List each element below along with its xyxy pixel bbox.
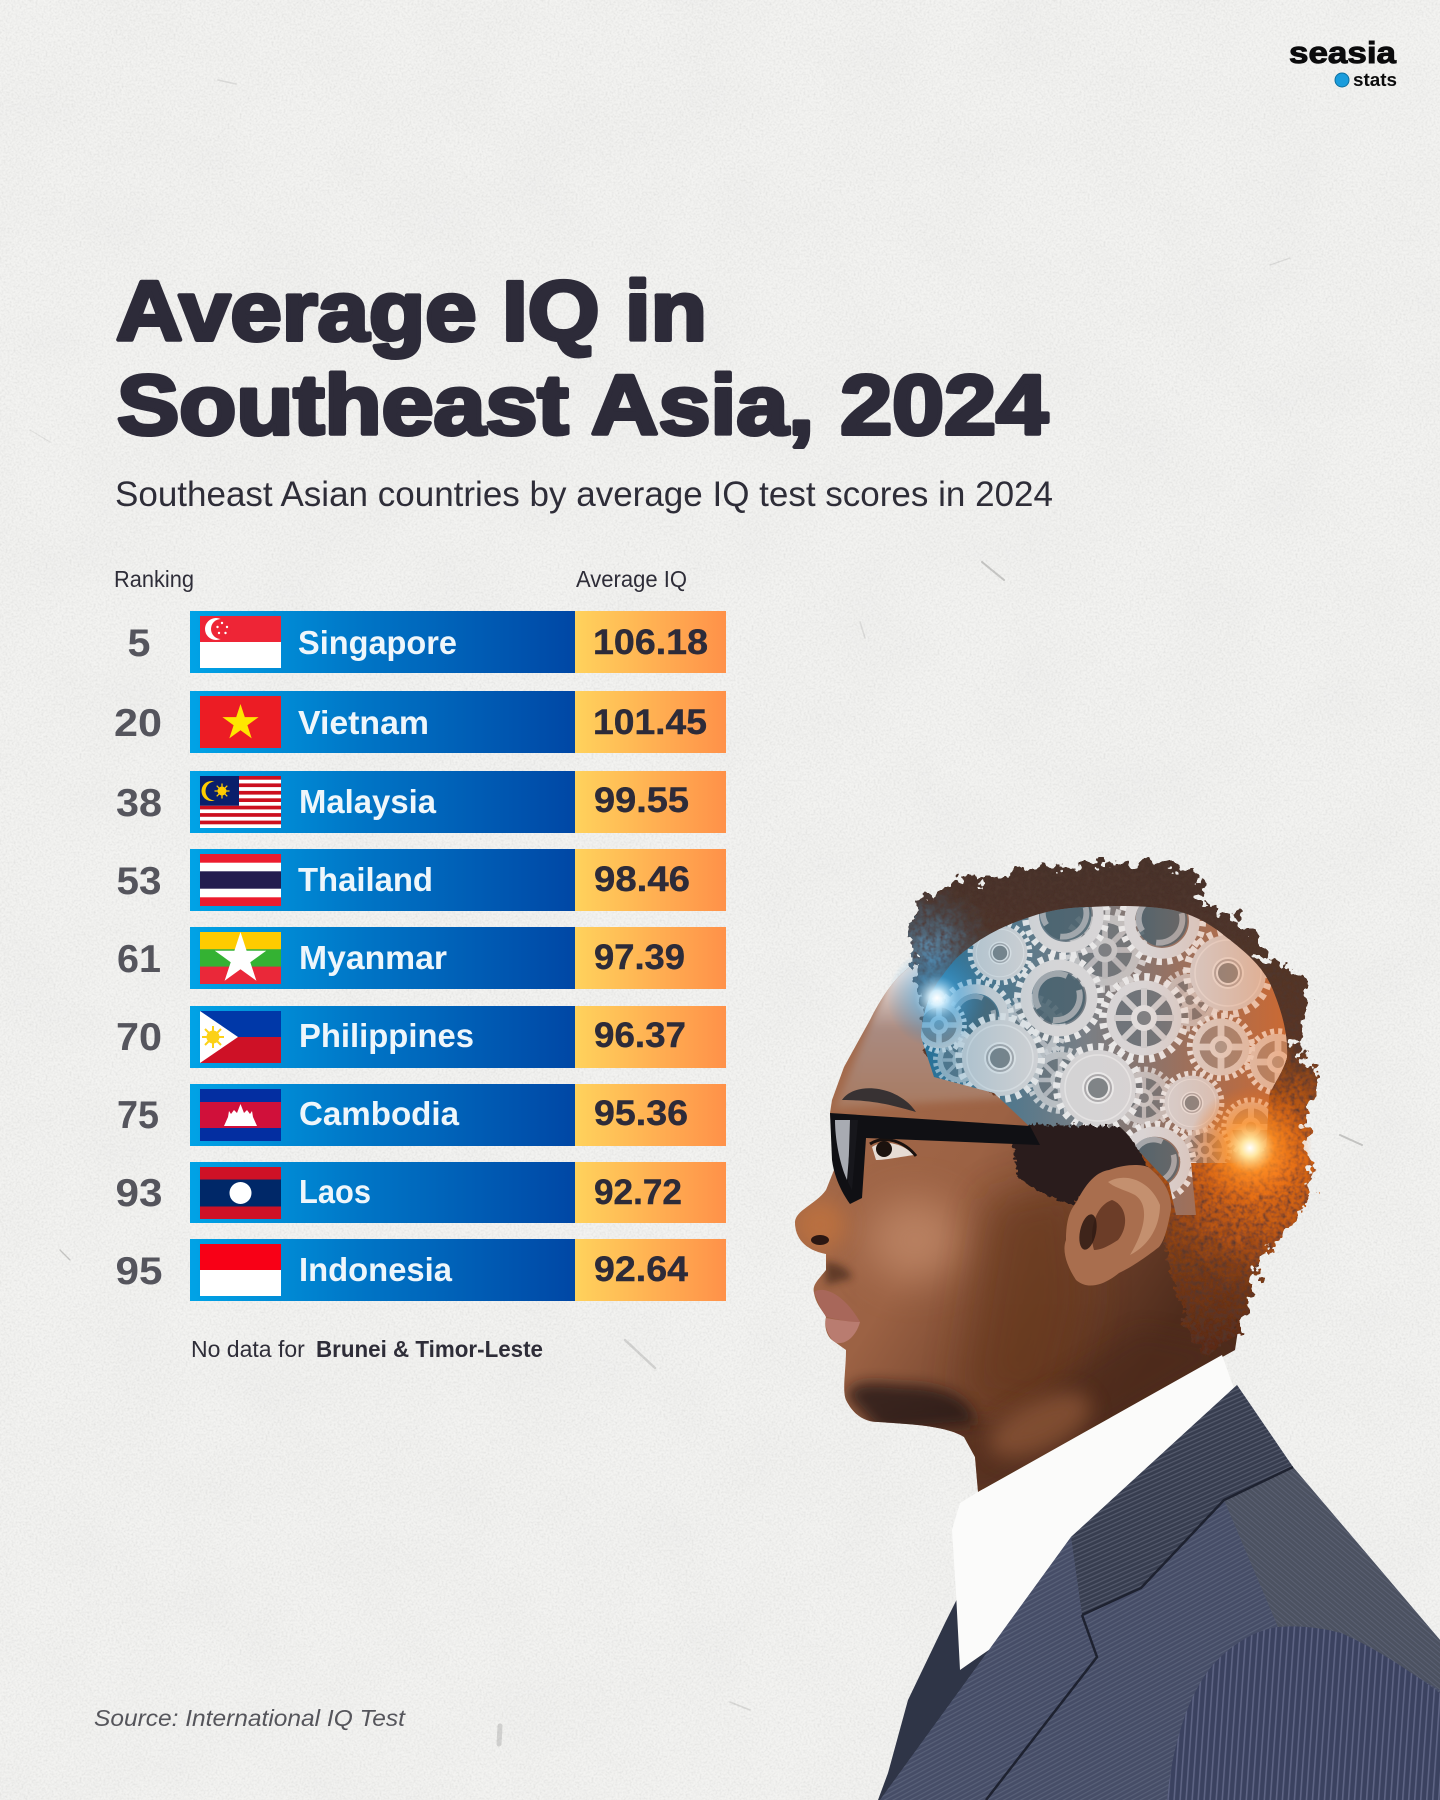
gears in head	[921, 906, 1288, 1215]
value box	[575, 771, 726, 833]
title: Average IQ in	[116, 264, 707, 358]
title	[116, 264, 1048, 452]
value: 101.45	[593, 703, 707, 742]
value box	[575, 1239, 726, 1301]
illustration: man in profile with gears	[794, 862, 1440, 1800]
value box	[575, 691, 726, 753]
value box	[575, 1084, 726, 1146]
row: Myanmar	[117, 927, 726, 989]
row: Thailand	[116, 849, 726, 911]
rank: 53	[116, 860, 162, 903]
bar	[190, 691, 575, 753]
flag: Cambodia	[200, 1089, 281, 1141]
skin: face and neck	[794, 950, 1250, 1500]
column header: Average IQ: Average IQ	[576, 566, 687, 592]
shoulder panel	[1224, 1467, 1440, 1690]
row: Vietnam	[114, 691, 726, 753]
value: 98.46	[594, 860, 690, 899]
flag: Myanmar	[200, 932, 281, 984]
rank: 93	[116, 1172, 162, 1215]
country name: Thailand	[298, 861, 433, 898]
lapel edge	[986, 1467, 1293, 1800]
rank: 95	[116, 1250, 162, 1293]
flag: Singapore	[200, 616, 281, 668]
logo subtext: stats	[1353, 70, 1397, 90]
value box	[575, 1006, 726, 1068]
rank: 70	[116, 1016, 162, 1059]
bar	[190, 1006, 575, 1068]
flag: Thailand	[200, 854, 281, 906]
bar	[190, 1162, 575, 1223]
value: 92.64	[594, 1250, 689, 1289]
rank: 5	[128, 622, 150, 665]
country name: Singapore	[298, 624, 457, 661]
row: Singapore	[128, 611, 726, 673]
subtitle: Southeast Asian countries by average IQ test scores in 2024	[115, 475, 1053, 514]
flare: blue light	[887, 948, 987, 1048]
source: Source: International IQ Test	[94, 1705, 407, 1731]
flag: Vietnam	[200, 696, 281, 748]
eyebrow	[842, 1088, 916, 1112]
value: 92.72	[594, 1173, 682, 1212]
jacket body	[880, 1385, 1440, 1800]
bar	[190, 1239, 575, 1301]
value box	[575, 611, 726, 673]
flag: Indonesia	[200, 1244, 281, 1296]
value box	[575, 927, 726, 989]
flare: orange light	[1188, 1086, 1312, 1210]
value: 99.55	[594, 781, 689, 820]
bar	[190, 1084, 575, 1146]
value: 97.39	[594, 938, 685, 977]
lapel	[880, 1537, 1097, 1800]
sleeve	[1167, 1626, 1440, 1800]
bar	[190, 771, 575, 833]
bar	[190, 611, 575, 673]
country name: Cambodia	[299, 1095, 460, 1132]
flag: Malaysia	[200, 776, 281, 828]
value: 106.18	[593, 623, 708, 662]
country name: Philippines	[299, 1017, 474, 1054]
bar	[190, 927, 575, 989]
eye	[870, 1140, 916, 1160]
icon: logo globe	[1335, 73, 1349, 87]
bar	[190, 849, 575, 911]
row: Indonesia	[116, 1239, 726, 1301]
column header: Ranking: Ranking	[114, 566, 194, 592]
rank: 20	[114, 702, 162, 745]
table of rankings	[114, 611, 726, 1301]
row: Laos	[116, 1162, 726, 1223]
title: Southeast Asia, 2024	[117, 358, 1048, 452]
value box	[575, 1162, 726, 1223]
row: Cambodia	[117, 1084, 726, 1146]
collar	[1071, 1385, 1293, 1615]
rank: 75	[117, 1094, 159, 1137]
jacket back piece	[878, 1597, 1000, 1800]
ear	[1064, 1165, 1171, 1286]
value: 96.37	[594, 1016, 686, 1055]
logo: seasia stats	[1289, 35, 1397, 90]
sideburn hair	[1012, 1125, 1148, 1205]
country name: Laos	[299, 1173, 371, 1210]
flag: Laos	[200, 1167, 281, 1219]
row: Malaysia	[116, 771, 726, 833]
logo: seasia stats: seasia	[1289, 35, 1397, 70]
country name: Indonesia	[299, 1251, 453, 1288]
footnote: No data for	[191, 1336, 305, 1362]
country name: Vietnam	[298, 704, 429, 741]
glasses	[830, 1113, 1040, 1204]
footnote: Brunei & Timor-Leste	[316, 1336, 543, 1362]
value box	[575, 849, 726, 911]
flag: Philippines	[200, 1011, 281, 1063]
country name: Malaysia	[299, 783, 437, 820]
hair	[910, 862, 1318, 1353]
row: Philippines	[116, 1006, 726, 1068]
shirt	[952, 1355, 1237, 1670]
rank: 61	[117, 938, 161, 981]
country name: Myanmar	[299, 939, 447, 976]
rank: 38	[116, 782, 162, 825]
value: 95.36	[594, 1094, 688, 1133]
